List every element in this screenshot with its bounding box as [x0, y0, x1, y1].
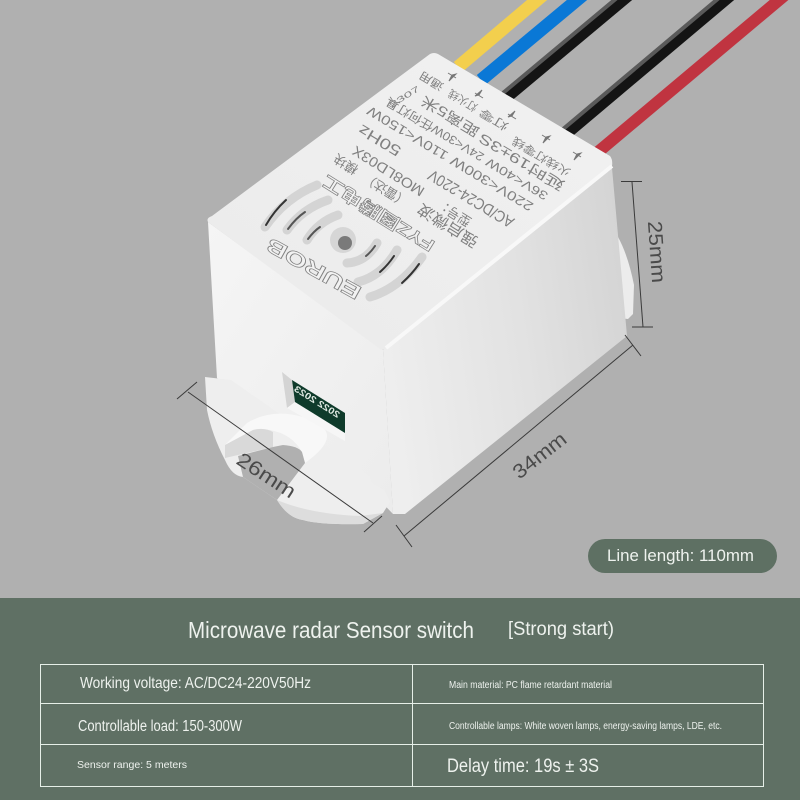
printed specification text: 距离5米 — [418, 93, 482, 140]
dimension: 34mm length — [396, 335, 641, 547]
right mounting tab — [614, 237, 634, 319]
radar slots — [265, 185, 422, 297]
printed specification text: 24V<30W任何灯具 — [383, 94, 487, 164]
panel subtitle: [Strong start) — [508, 619, 614, 640]
mounting tab with slot — [205, 377, 390, 524]
printed specification text: 强启微波 — [415, 200, 482, 250]
dimension: 25mm height — [621, 182, 669, 327]
chamfer highlight — [386, 166, 612, 348]
logo EUROB: EUROB — [263, 233, 365, 303]
working voltage: Working voltage: AC/DC24-220V50Hz — [80, 675, 311, 692]
photo background — [0, 0, 800, 598]
specification panel — [0, 598, 800, 800]
line length pill — [588, 539, 777, 573]
printed specification text: 延时19±3S — [476, 130, 567, 194]
connector window with circuit board: 2022 2023 — [292, 384, 342, 420]
brand logo: FYZ图腾电工 — [319, 171, 438, 255]
printed specification text — [331, 68, 573, 250]
printed specification text: 50Hz — [355, 121, 404, 159]
printed specification text: 36V<40W — [483, 154, 551, 203]
sensor range: Sensor range: 5 meters — [77, 759, 187, 771]
black wire one — [503, 0, 628, 97]
printed specification text: （雷达） — [361, 170, 411, 209]
dimension: 26mm width: 26mm — [232, 449, 300, 503]
blue wire — [481, 0, 583, 80]
controllable lamps: Controllable lamps: White woven lamps, energy-saving lamps, LDE, etc. — [449, 721, 722, 732]
yellow wire — [458, 0, 543, 67]
printed specification text: 110V<150W — [363, 103, 451, 163]
dimension: 26mm width — [177, 382, 382, 532]
front face — [208, 222, 393, 514]
dimension: 34mm length: 34mm — [509, 428, 571, 484]
printed specification text: 火线灯零线 — [509, 134, 573, 180]
module housing — [205, 53, 627, 524]
specification table — [40, 664, 764, 787]
printed specification text: MO8LD03X — [349, 142, 427, 200]
sensor hole — [330, 227, 356, 253]
black wire two — [562, 0, 730, 134]
printed specification text: 灯火线 — [445, 86, 480, 115]
printed specification text: 2307 — [388, 84, 422, 110]
delay time: Delay time: 19s ± 3S — [447, 756, 599, 777]
dimension: 25mm height: 25mm — [643, 220, 669, 284]
printed specification text: 型号： — [434, 197, 474, 229]
red wire — [598, 0, 785, 152]
panel title: Microwave radar Sensor switch — [188, 617, 474, 643]
right side face — [383, 168, 627, 514]
wires — [458, 0, 785, 152]
top face — [208, 53, 612, 350]
connector window with circuit board — [282, 372, 345, 441]
main material: Main material: PC flame retardant material — [449, 680, 612, 691]
controllable load: Controllable load: 150-300W — [78, 718, 242, 735]
terminal arrows — [448, 73, 581, 160]
printed specification text: 通用 — [417, 68, 446, 93]
printed specification text: AC/DC24-220V — [425, 166, 517, 230]
line length pill: Line length: 110mm — [607, 546, 754, 565]
printed specification text: 模块 — [331, 151, 361, 177]
printed specification text: 220V<300W — [447, 153, 536, 214]
printed specification text: 灯零 — [477, 105, 511, 133]
